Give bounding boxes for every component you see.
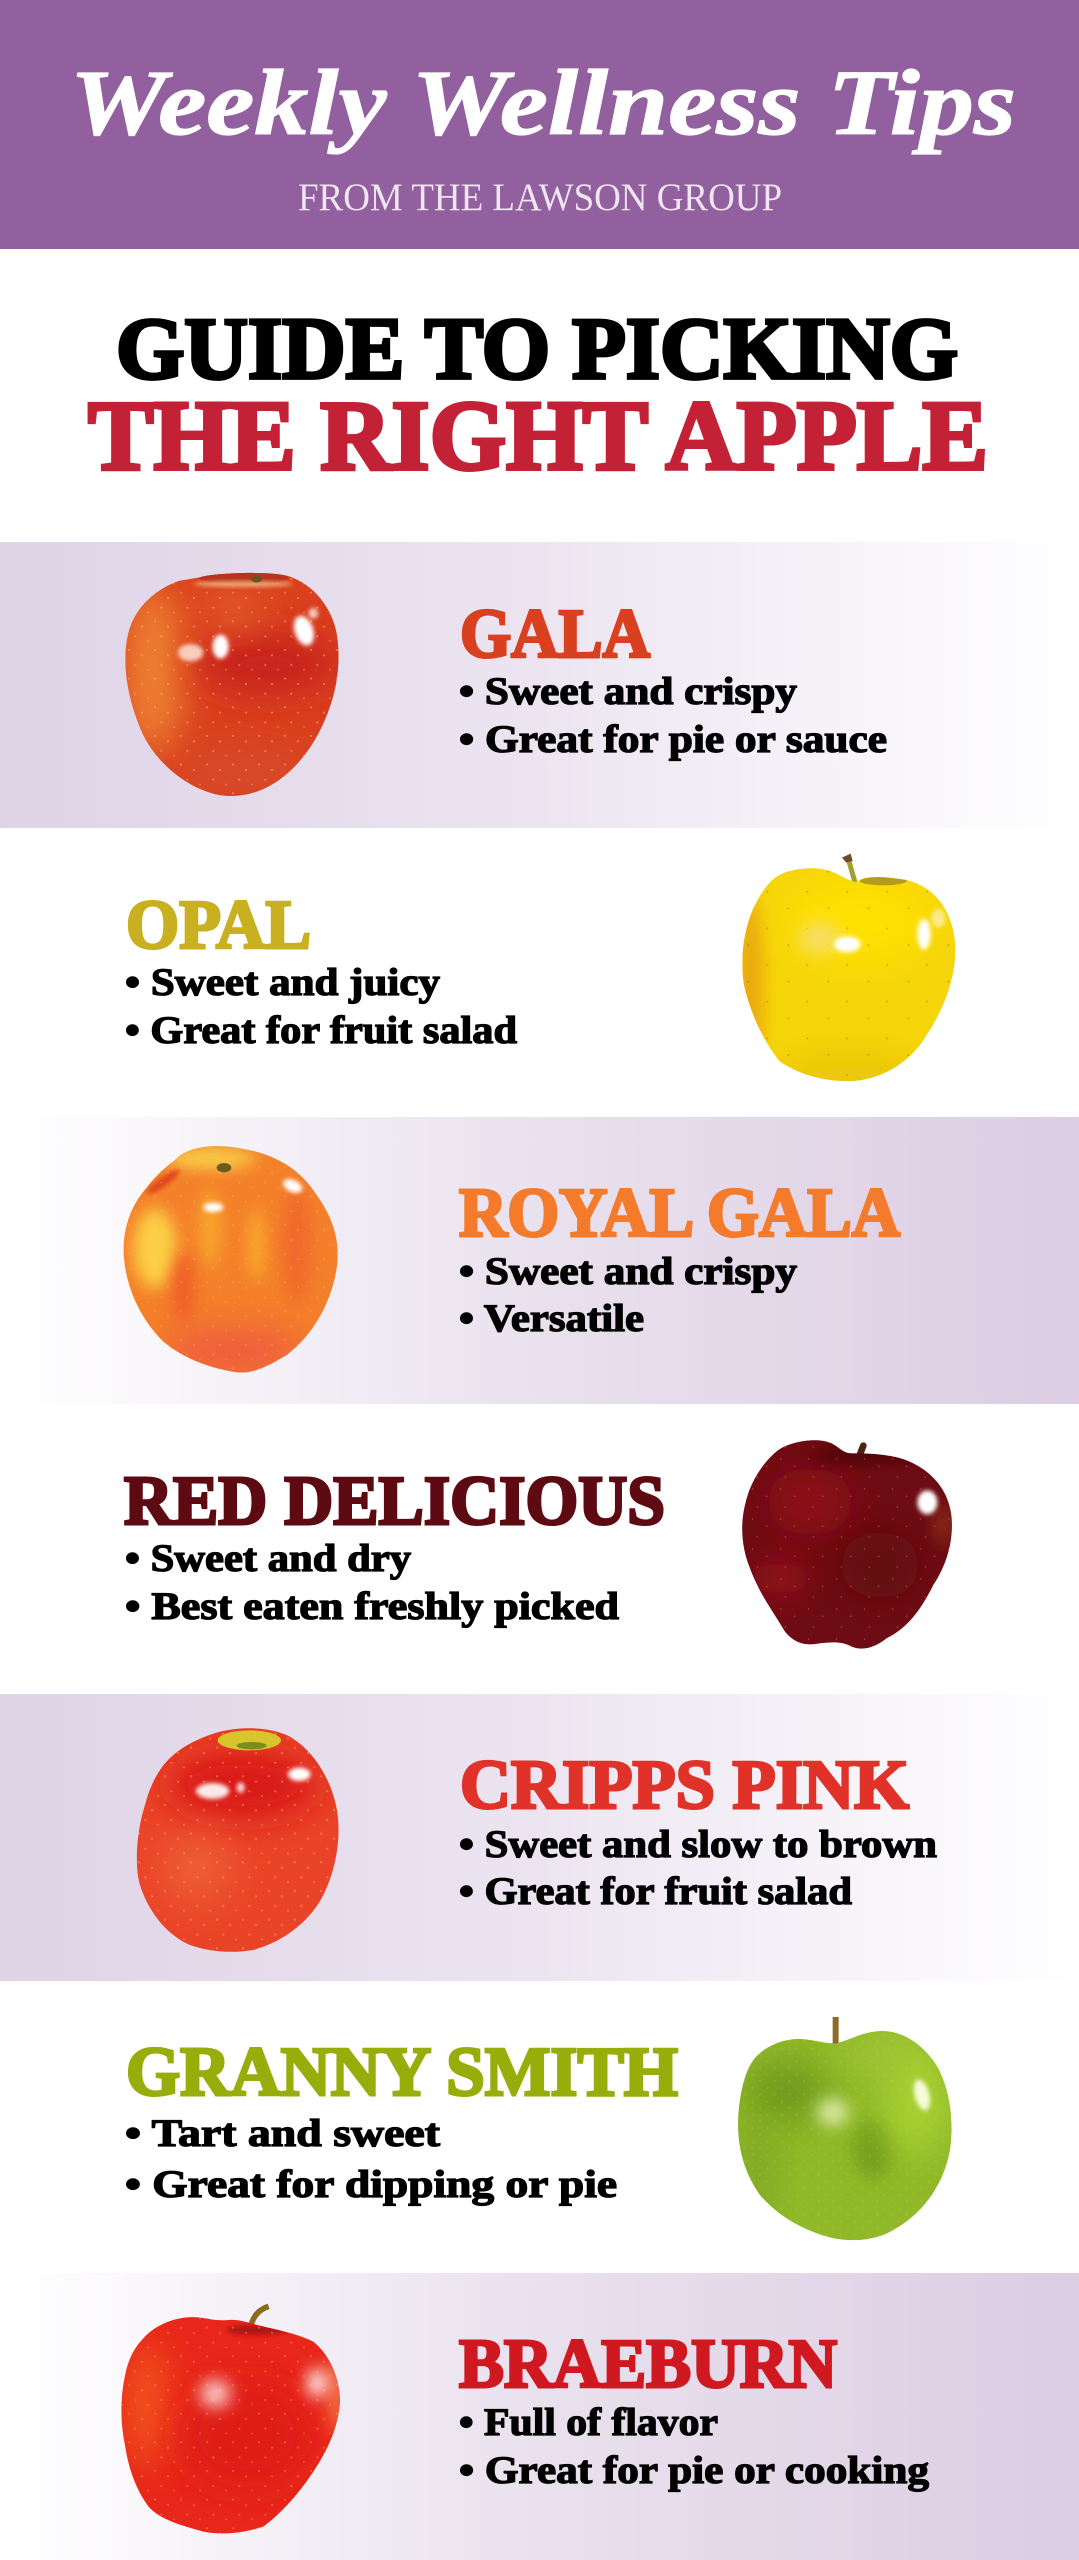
subtitle: FROM THE LAWSON GROUP <box>298 176 782 219</box>
main heading <box>88 301 988 491</box>
panel: granny smith <box>126 2017 952 2240</box>
characteristics: • Full of flavor <box>459 2401 718 2444</box>
variety name: GRANNY SMITH <box>126 2034 678 2111</box>
title: Weekly Wellness Tips <box>70 52 1016 155</box>
icon: gala apple <box>125 572 338 796</box>
icon: granny smith apple <box>738 2017 952 2240</box>
icon: red delicious apple <box>742 1440 952 1649</box>
panel: braeburn <box>121 2273 1079 2560</box>
characteristics <box>459 1823 937 1913</box>
row background <box>0 542 1079 828</box>
variety name: OPAL <box>126 887 311 964</box>
icon: opal apple <box>742 854 956 1082</box>
characteristics: • Tart and sweet <box>125 2112 440 2155</box>
characteristics <box>125 1537 619 1628</box>
variety name: GALA <box>460 596 650 673</box>
characteristics: • Sweet and dry <box>125 1537 412 1580</box>
panel: opal <box>126 854 956 1082</box>
characteristics: • Great for pie or sauce <box>459 718 887 761</box>
panel: gala <box>0 542 912 828</box>
panel: royal gala <box>124 1117 1079 1404</box>
characteristics: • Sweet and crispy <box>459 1250 798 1293</box>
characteristics: • Sweet and slow to brown <box>459 1823 937 1866</box>
heading line 1: GUIDE TO PICKING <box>116 301 958 398</box>
characteristics <box>459 1250 798 1340</box>
characteristics <box>459 670 887 761</box>
characteristics: • Best eaten freshly picked <box>125 1585 619 1628</box>
panel: red delicious <box>124 1440 952 1649</box>
icon: cripps pink apple <box>136 1728 338 1952</box>
characteristics <box>125 2112 617 2206</box>
characteristics: • Versatile <box>459 1297 644 1340</box>
characteristics: • Sweet and juicy <box>125 961 441 1004</box>
icon: royal gala apple <box>124 1146 338 1373</box>
characteristics: • Great for fruit salad <box>125 1009 517 1052</box>
row background <box>0 2273 1079 2560</box>
variety name: BRAEBURN <box>459 2326 837 2403</box>
characteristics: • Great for dipping or pie <box>125 2163 617 2206</box>
variety name: RED DELICIOUS <box>124 1463 665 1540</box>
variety name: CRIPPS PINK <box>460 1747 909 1824</box>
variety name: ROYAL GALA <box>459 1175 900 1252</box>
row background <box>0 1694 1079 1981</box>
heading line 2: THE RIGHT APPLE <box>88 380 988 491</box>
header banner <box>0 0 1079 249</box>
characteristics <box>459 2401 930 2492</box>
characteristics: • Sweet and crispy <box>459 670 798 713</box>
row background <box>0 1117 1079 1404</box>
panel: cripps pink <box>0 1694 938 1981</box>
characteristics <box>125 961 517 1052</box>
icon: braeburn apple <box>121 2304 340 2534</box>
characteristics: • Great for fruit salad <box>459 1870 852 1913</box>
characteristics: • Great for pie or cooking <box>459 2449 930 2492</box>
